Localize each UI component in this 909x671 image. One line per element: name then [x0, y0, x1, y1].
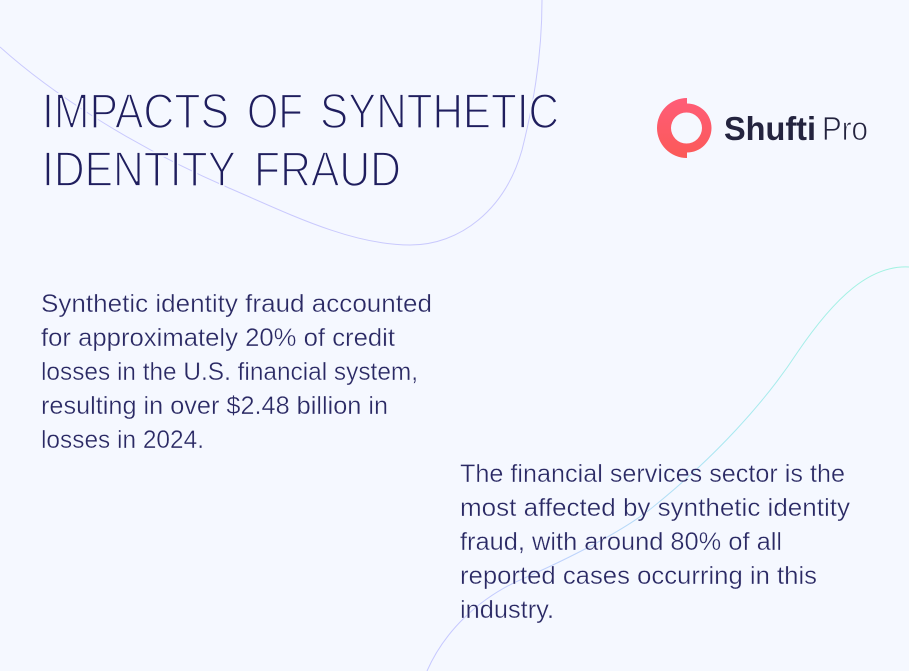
title: OF	[247, 85, 303, 139]
text block: financial services sector: most affected by synthetic identity	[460, 494, 851, 522]
text block: credit losses	[41, 290, 432, 454]
title: FRAUD	[254, 143, 401, 197]
logo wordmark: Shufti	[724, 110, 816, 147]
text block: financial services sector	[460, 460, 851, 624]
title: SYNTHETIC	[320, 85, 559, 139]
icon: logo ring	[657, 98, 712, 158]
text block: credit losses: resulting in over $2.48 billion in	[41, 392, 388, 420]
logo: Shufti Pro	[657, 98, 868, 158]
text block: financial services sector: reported cases occurring in this	[460, 562, 817, 590]
logo wordmark: Pro	[822, 110, 868, 147]
text block: financial services sector: industry.	[460, 596, 554, 624]
logo wordmark	[724, 110, 868, 147]
title	[42, 85, 559, 197]
title: IMPACTS	[42, 85, 229, 139]
text block: credit losses: for approximately 20% of credit	[41, 324, 395, 352]
text block: credit losses: losses in 2024.	[41, 426, 204, 454]
text block: financial services sector: The financial services sector is the	[460, 460, 845, 488]
text block: credit losses: Synthetic identity fraud accounted	[41, 290, 432, 318]
title: IDENTITY	[42, 143, 236, 197]
text block: credit losses: losses in the U.S. financial system,	[41, 358, 418, 386]
text block: financial services sector: fraud, with around 80% of all	[460, 528, 782, 556]
